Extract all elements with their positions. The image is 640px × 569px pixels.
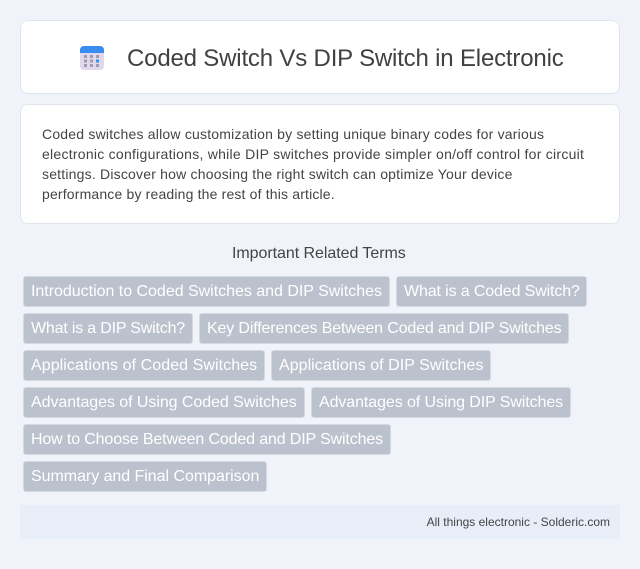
tag: What is a DIP Switch? xyxy=(31,320,185,337)
text block: introduction: electronic configurations, while DIP switches provide simpler on/off control for circuit xyxy=(42,146,584,162)
tag: Summary and Final Comparison xyxy=(31,468,259,485)
tag: Advantages of Using Coded Switches xyxy=(31,394,297,411)
tag xyxy=(396,276,587,307)
tag xyxy=(23,313,193,344)
tag: Applications of DIP Switches xyxy=(279,357,483,374)
footer credit: All things electronic - Solderic.com xyxy=(427,515,610,529)
tag xyxy=(23,276,390,307)
tag: Advantages of Using DIP Switches xyxy=(319,394,563,411)
tag xyxy=(271,350,491,381)
tag: How to Choose Between Coded and DIP Switches xyxy=(31,431,383,448)
text block: introduction: Coded switches allow customization by setting unique binary codes for various xyxy=(42,126,544,142)
icon: calendar keypad xyxy=(80,46,104,70)
tag: Introduction to Coded Switches and DIP Switches xyxy=(31,283,382,300)
text block: introduction: settings. Discover how choosing the right switch can optimize Your device xyxy=(42,166,513,182)
tag xyxy=(311,387,571,418)
tag: What is a Coded Switch? xyxy=(404,283,580,300)
heading: related terms: Important Related Terms xyxy=(232,245,406,262)
tag xyxy=(23,461,267,492)
tag xyxy=(23,387,305,418)
tag: Applications of Coded Switches xyxy=(31,357,257,374)
panel: related term tags xyxy=(23,276,587,492)
text block: introduction: performance by reading the rest of this article. xyxy=(42,186,335,202)
tag xyxy=(23,424,391,455)
footer bar xyxy=(20,505,620,539)
text block: introduction xyxy=(42,126,584,202)
tag: Key Differences Between Coded and DIP Switches xyxy=(207,320,562,337)
tag xyxy=(23,350,265,381)
panel: introduction xyxy=(20,104,620,224)
title: Coded Switch Vs DIP Switch in Electronic xyxy=(127,45,564,72)
tag xyxy=(199,313,569,344)
panel: title card xyxy=(20,20,620,94)
